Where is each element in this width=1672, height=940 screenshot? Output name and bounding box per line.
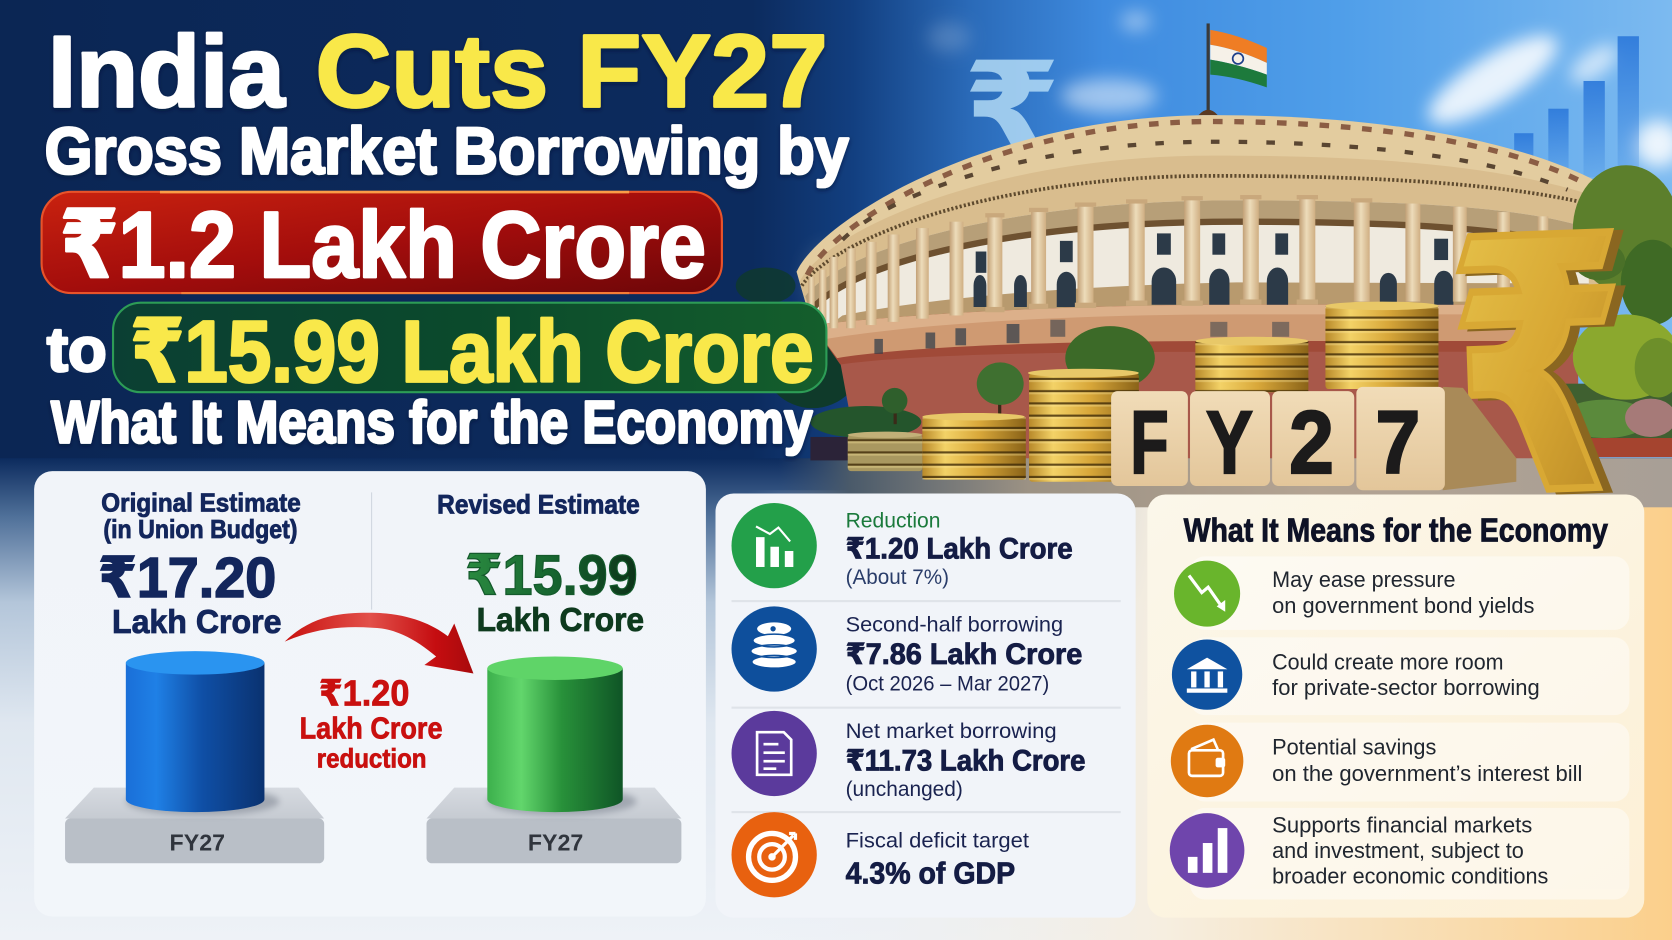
icon: coin stack: [732, 606, 817, 692]
green pill: 15.99 lakh crore: ₹15.99 Lakh Crore: [130, 303, 814, 401]
red pill: 1.2 lakh crore: ₹1.2 Lakh Crore: [60, 192, 706, 297]
clouds: [928, 12, 1672, 167]
FY27 wooden blocks: 7: [1376, 392, 1420, 492]
parliament building: [797, 115, 1612, 460]
row: financial markets: [1170, 812, 1548, 889]
row: interest savings: on the government’s interest bill: [1272, 761, 1582, 786]
reduction label: reduction: [317, 743, 427, 773]
panel: key figures: [716, 493, 1136, 918]
second-half text: [846, 612, 1082, 696]
headline: Cuts FY27: [316, 13, 827, 129]
net borrowing text: ₹11.73 Lakh Crore: [846, 745, 1086, 778]
row: financial markets: Supports financial markets: [1272, 812, 1532, 837]
reduction text: [846, 509, 1073, 589]
blue cylinder: [126, 651, 279, 815]
revised value: [465, 544, 644, 639]
net borrowing text: Net market borrowing: [846, 719, 1057, 743]
net borrowing text: [846, 719, 1086, 801]
Indian flag: [1199, 23, 1267, 115]
fiscal deficit text: 4.3% of GDP: [846, 856, 1015, 891]
row: financial markets: and investment, subject to: [1272, 838, 1524, 863]
second-half text: (Oct 2026 – Mar 2027): [846, 672, 1049, 696]
ground and hedges: [778, 384, 1672, 507]
fiscal deficit text: Fiscal deficit target: [846, 828, 1029, 852]
headline: India: [48, 16, 285, 129]
platform left: FY27: [170, 829, 225, 855]
revised value: Lakh Crore: [477, 602, 644, 639]
row: interest savings: Potential savings: [1272, 735, 1436, 760]
revised estimate heading: Revised Estimate: [437, 490, 640, 520]
original value: Lakh Crore: [112, 604, 282, 641]
row: private borrowing: Could create more room: [1272, 649, 1504, 674]
headline: Gross Market Borrowing by: [45, 115, 849, 189]
faint rupee symbol: ₹: [963, 37, 1061, 178]
coin stacks: [848, 302, 1438, 482]
net borrowing text: (unchanged): [846, 777, 963, 801]
original value: [98, 546, 282, 641]
to label: to: [47, 316, 107, 385]
reduction label: ₹1.20: [319, 673, 409, 714]
green cylinder: [487, 657, 637, 815]
panel: estimates comparison: [34, 471, 706, 917]
icon: document: [732, 711, 817, 796]
icon: target: [732, 812, 817, 897]
revised value: ₹15.99: [465, 544, 638, 607]
trees: [882, 165, 1672, 424]
reduction label: [300, 673, 443, 773]
row: bond yields: on government bond yields: [1272, 593, 1534, 618]
FY27 wooden blocks: [1111, 387, 1516, 492]
reduction text: Reduction: [846, 509, 940, 533]
second-half text: Second-half borrowing: [846, 612, 1063, 636]
row: financial markets: broader economic conditions: [1272, 864, 1548, 889]
icon: falling bars: [732, 503, 817, 588]
platform right: [427, 788, 681, 863]
platform right: FY27: [528, 829, 583, 855]
original estimate heading: [101, 490, 301, 544]
row: private borrowing: [1172, 639, 1540, 710]
FY27 wooden blocks: 2: [1289, 392, 1334, 492]
row: private borrowing: for private-sector borrowing: [1272, 675, 1540, 700]
FY27 wooden blocks: Y: [1206, 392, 1253, 492]
faint background bar chart: [1514, 36, 1639, 187]
row: bond yields: May ease pressure: [1272, 567, 1456, 592]
reduction text: (About 7%): [846, 565, 949, 589]
reduction arrow: [285, 613, 473, 674]
second-half text: ₹7.86 Lakh Crore: [846, 638, 1082, 671]
original estimate heading: (in Union Budget): [103, 516, 298, 544]
panel: what it means: [1147, 495, 1644, 918]
subtitle: What It Means for the Economy: [51, 388, 813, 455]
reduction label: Lakh Crore: [300, 711, 443, 746]
panel heading: What It Means for the Economy: [1184, 512, 1609, 549]
row: interest savings: [1171, 725, 1582, 797]
platform left: [65, 788, 324, 863]
fiscal deficit text: [846, 828, 1029, 891]
row: bond yields: [1174, 561, 1534, 627]
dark tree behind headline pills: [736, 268, 864, 408]
FY27 wooden blocks: F: [1130, 392, 1169, 492]
headline: [45, 13, 849, 189]
original estimate heading: Original Estimate: [101, 490, 301, 518]
original value: ₹17.20: [98, 546, 276, 609]
reduction text: ₹1.20 Lakh Crore: [846, 532, 1073, 565]
